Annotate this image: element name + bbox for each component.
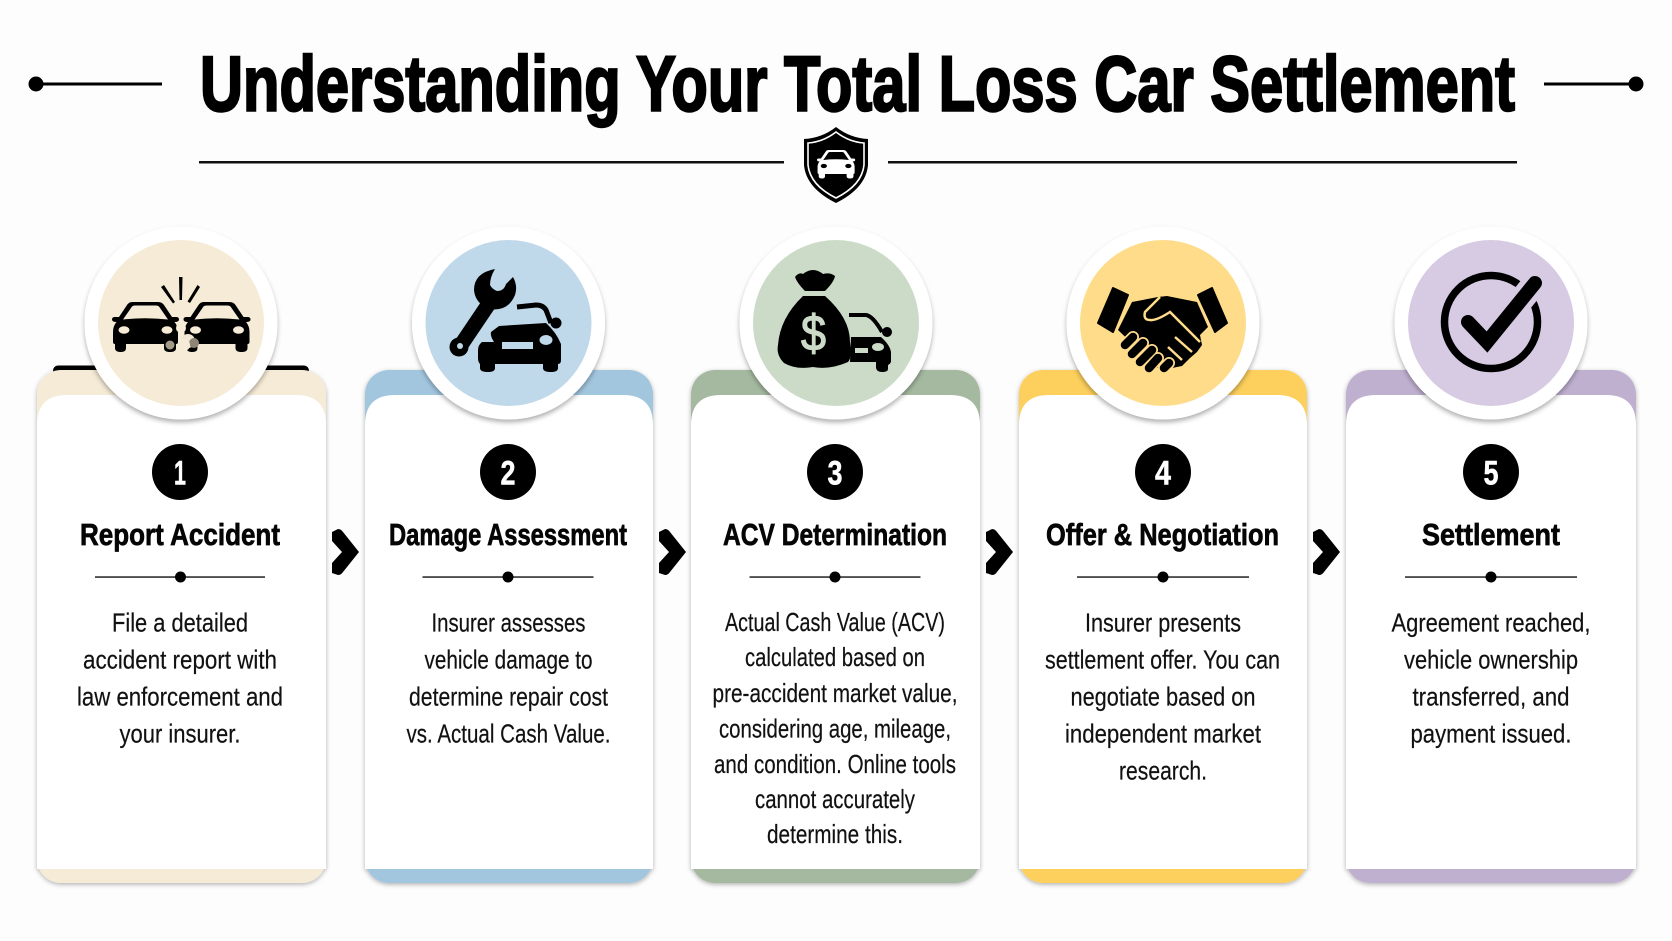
body text: Actual Cash Value (ACV): [725, 607, 945, 637]
body text: vehicle damage to: [424, 644, 592, 674]
header rule: right: [888, 161, 1517, 164]
step number: [1135, 444, 1191, 500]
heading: Report Accident: [80, 517, 280, 552]
body text: independent market: [1065, 718, 1262, 748]
icon badge 3: money bag and car: [740, 226, 932, 420]
body text: Insurer assesses: [432, 608, 586, 638]
body text: [712, 607, 958, 849]
divider: [95, 572, 265, 582]
step number: 2: [500, 454, 516, 492]
body text: your insurer.: [120, 718, 240, 748]
step number: [1463, 444, 1519, 500]
body text: negotiate based on: [1070, 682, 1256, 712]
card 3: [691, 370, 980, 883]
body text: vehicle ownership: [1404, 644, 1578, 674]
body text: [1392, 608, 1590, 748]
body text: research.: [1119, 756, 1207, 786]
card 5: [1346, 370, 1636, 883]
step number: [152, 444, 208, 500]
body text: considering age, mileage,: [719, 714, 951, 744]
body text: Insurer presents: [1085, 608, 1241, 638]
heading: ACV Determination: [723, 517, 947, 552]
title ornament: right: [1544, 76, 1644, 92]
arrow 3: [986, 529, 1013, 575]
body text: settlement offer. You can: [1045, 644, 1280, 674]
body text: File a detailed: [112, 608, 248, 638]
arrow 2: [659, 529, 686, 575]
body text: [77, 608, 283, 748]
heading: Damage Assessment: [389, 517, 627, 552]
body text: cannot accurately: [755, 784, 915, 814]
body text: transferred, and: [1412, 682, 1570, 712]
card 1: [37, 366, 326, 883]
arrow 1: [332, 529, 359, 575]
step number: [480, 444, 536, 500]
body text: [1045, 608, 1280, 786]
card 2: [365, 370, 653, 883]
body text: determine repair cost: [409, 682, 609, 712]
card 4: [1019, 370, 1307, 883]
divider: [422, 572, 594, 582]
body text: pre-accident market value,: [712, 678, 958, 708]
icon badge 1: collision: [84, 226, 278, 420]
step number: [807, 444, 863, 500]
icon badge 2: wrench and car: [412, 226, 605, 420]
arrow 4: [1313, 529, 1340, 575]
divider: [1405, 572, 1577, 582]
icon: shield with car: [804, 127, 868, 203]
step number: 5: [1484, 454, 1498, 492]
body text: payment issued.: [1410, 718, 1572, 748]
body text: determine this.: [767, 819, 903, 849]
heading: Offer & Negotiation: [1046, 517, 1279, 552]
divider: [1077, 572, 1249, 582]
step number: 4: [1155, 454, 1171, 492]
body text: Agreement reached,: [1392, 608, 1590, 638]
icon badge 3: money bag and car: $: [801, 305, 826, 361]
title ornament: left: [28, 76, 162, 92]
step number: 1: [174, 454, 186, 492]
header rule: left: [199, 161, 784, 164]
step number: 3: [828, 454, 842, 492]
icon badge 5: check mark: [1394, 226, 1588, 420]
body text: [406, 608, 610, 748]
body text: and condition. Online tools: [714, 749, 956, 779]
heading: Settlement: [1422, 517, 1560, 552]
divider: [750, 572, 920, 582]
body text: calculated based on: [745, 642, 925, 672]
icon badge 4: handshake: [1066, 226, 1260, 420]
body text: accident report with: [83, 644, 277, 674]
body text: vs. Actual Cash Value.: [406, 718, 610, 748]
body text: law enforcement and: [77, 682, 283, 712]
